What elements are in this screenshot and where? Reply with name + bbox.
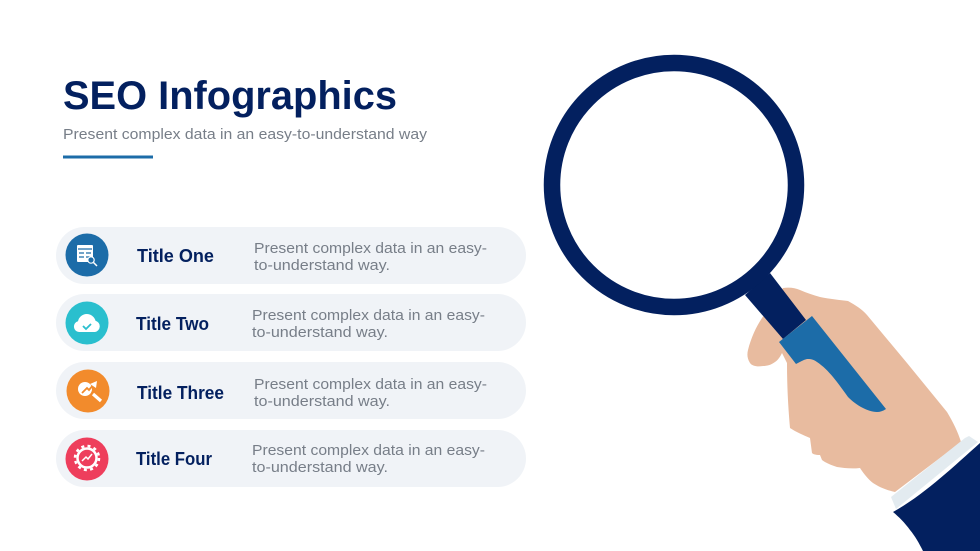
description: to-understand way. [252,324,388,341]
handle [745,273,806,339]
description: to-understand way. [254,257,390,274]
title: SEO Infographics [63,74,397,118]
panel: title two [56,294,526,351]
icon: gear chart [66,438,108,480]
description: Present complex data in an easy- [254,240,487,257]
description [254,240,487,274]
icon: growth search [66,370,110,412]
description [254,376,487,410]
magnifier ring [552,63,796,307]
title underline [63,156,153,158]
heading: Title Two [136,313,209,334]
description: Present complex data in an easy- [252,442,485,459]
description [252,442,485,476]
description: to-understand way. [254,393,390,410]
description: Present complex data in an easy- [252,307,485,324]
panel: title three [56,362,526,419]
description: to-understand way. [252,459,388,476]
panel: title four [56,430,526,487]
description [252,307,485,341]
subtitle: Present complex data in an easy-to-understand way [63,126,428,143]
icon: browser search [66,234,108,276]
panel: title one [56,227,526,284]
icon: cloud check [66,302,108,344]
sleeve [893,443,980,551]
description: Present complex data in an easy- [254,376,487,393]
sleeve cuff [891,436,978,509]
heading: Title Four [136,448,212,469]
handle grip [779,316,886,412]
magnifying glass and hand illustration [552,63,980,551]
hand [747,288,961,492]
heading: Title Three [137,382,224,403]
heading: Title One [137,245,214,266]
